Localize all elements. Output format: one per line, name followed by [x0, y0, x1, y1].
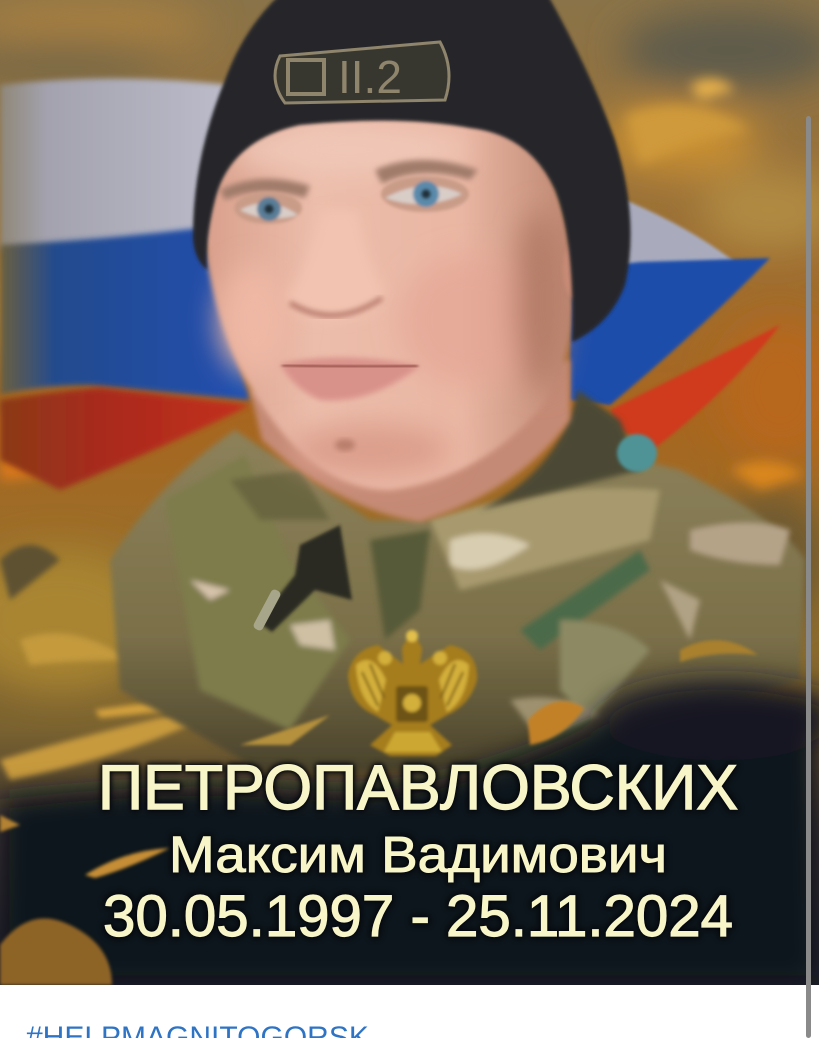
- flag: red band: [0, 388, 250, 490]
- Russian flag: [0, 78, 780, 490]
- scrollbar: [806, 116, 811, 1038]
- first name and patronymic: Максим Вадимович: [169, 826, 667, 883]
- collar: [480, 390, 640, 510]
- nose: [292, 276, 376, 304]
- beanie patch: II.2: [338, 51, 402, 103]
- chin dimple: [335, 439, 355, 451]
- ear: [564, 250, 574, 299]
- soldier portrait: [110, 0, 805, 770]
- beanie patch: [275, 42, 449, 103]
- mouth: [280, 357, 420, 401]
- eyebrows: [220, 160, 478, 200]
- eyes: [234, 176, 469, 224]
- flag: white band: [0, 74, 226, 250]
- flag: blue band: [0, 228, 250, 400]
- surname: ПЕТРОПАВЛОВСКИХ: [98, 753, 738, 823]
- jacket zip pull: [258, 525, 352, 632]
- dark clouds bottom overlay: [0, 680, 819, 985]
- double-headed eagle emblem: [348, 630, 477, 756]
- name text block: [98, 753, 738, 949]
- jacket: [110, 430, 805, 770]
- black beanie: [193, 0, 631, 342]
- neck: [250, 360, 570, 522]
- dates: 30.05.1997 - 25.11.2024: [103, 884, 733, 949]
- face: [205, 112, 573, 490]
